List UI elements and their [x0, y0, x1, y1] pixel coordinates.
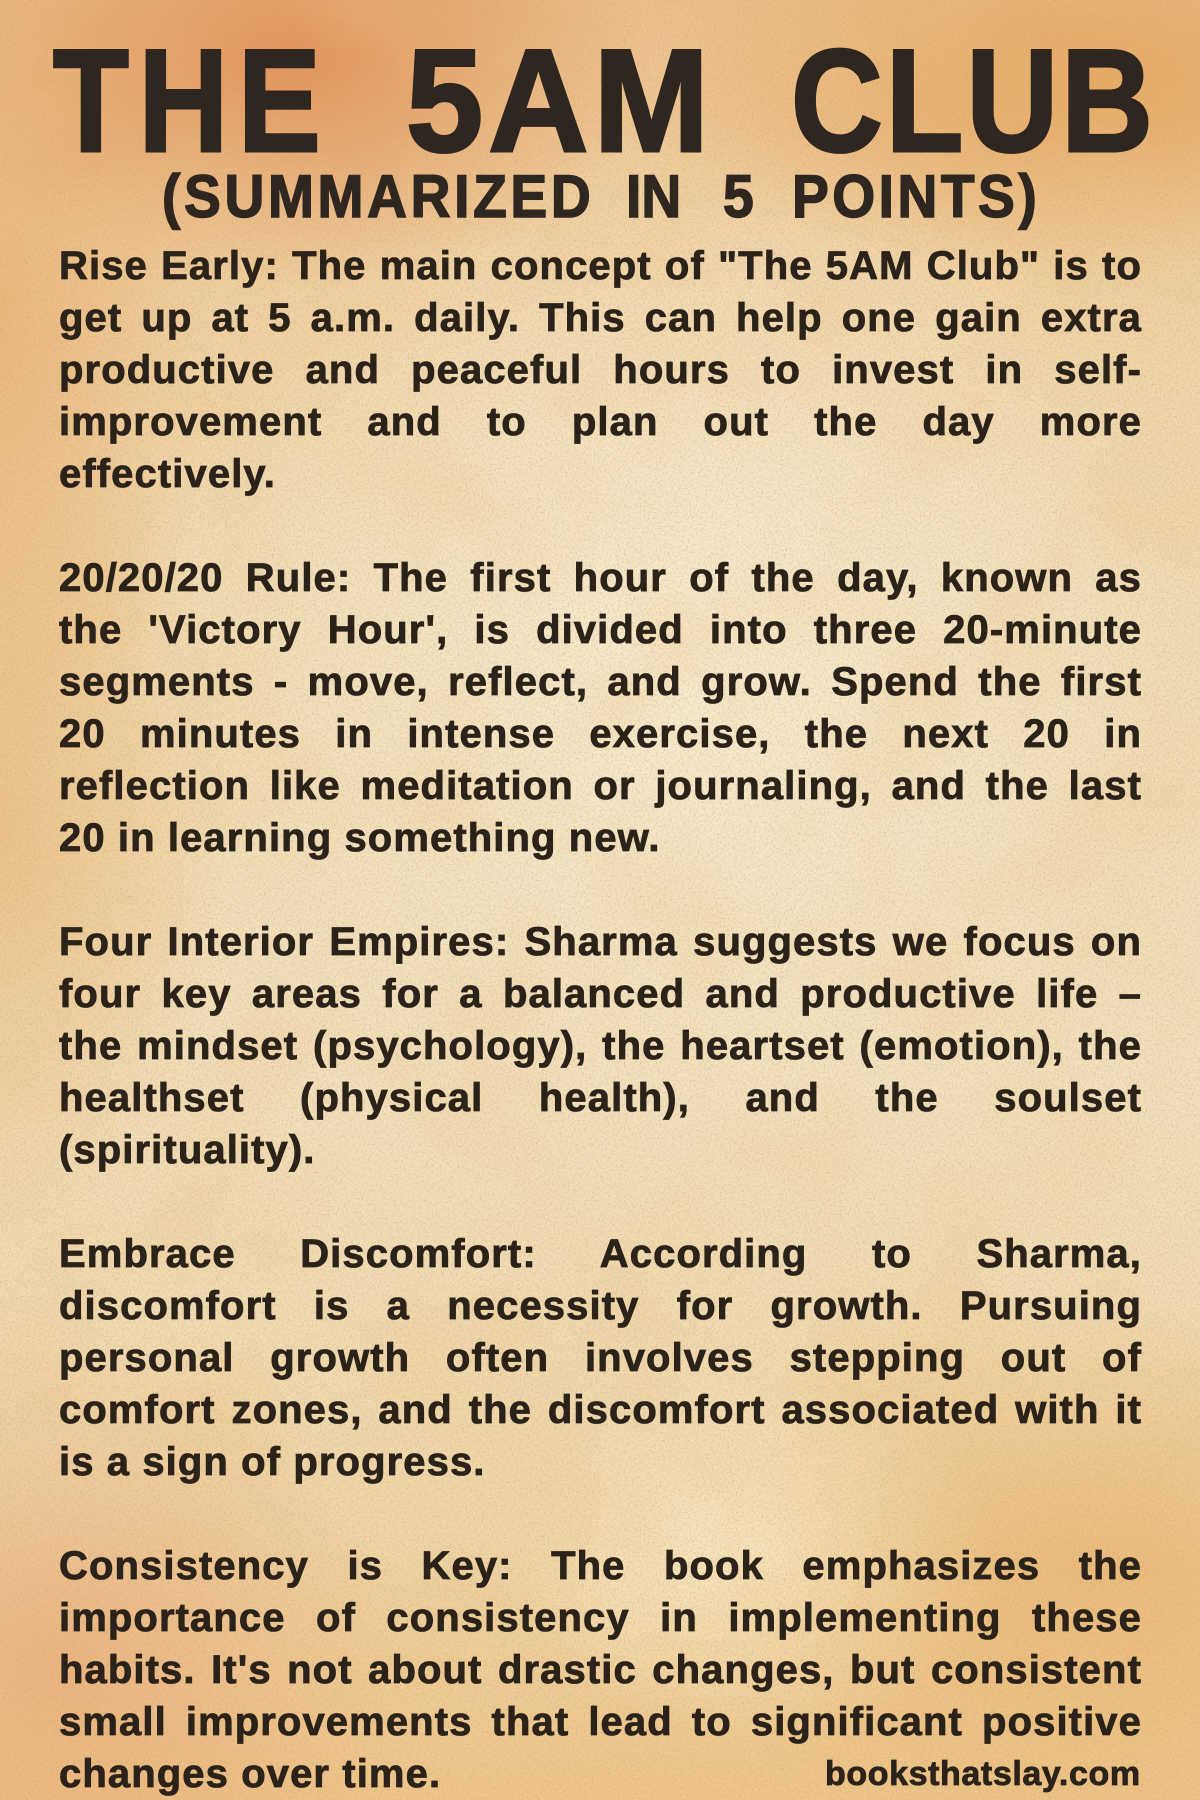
- title: THE: [53, 18, 321, 182]
- subtitle: (SUMMARIZED: [162, 164, 591, 231]
- point 1: rise early: Rise Early: The main concept of "The 5AM Club" is to: [59, 244, 1142, 288]
- point 5: consistency is key: habits. It's not about drastic changes, but consistent: [59, 1648, 1142, 1692]
- point 2: 20/20/20 rule: 20 in learning something new.: [59, 816, 661, 860]
- subtitle: POINTS): [792, 164, 1037, 231]
- point 3: four interior empires: healthset (physical health), and the soulset: [59, 1076, 1142, 1120]
- point 4: embrace discomfort: discomfort is a necessity for growth. Pursuing: [59, 1284, 1142, 1328]
- point 5: consistency is key: Consistency is Key: The book emphasizes the: [59, 1544, 1142, 1588]
- point 2: 20/20/20 rule: 20 minutes in intense exercise, the next 20 in: [59, 712, 1142, 756]
- point 4: embrace discomfort: is a sign of progress.: [59, 1440, 486, 1484]
- point 4: embrace discomfort: personal growth often involves stepping out of: [59, 1336, 1142, 1380]
- point 2: 20/20/20 rule: segments - move, reflect, and grow. Spend the first: [59, 660, 1142, 704]
- point 1: rise early: effectively.: [59, 452, 276, 496]
- point 5: consistency is key: importance of consistency in implementing these: [59, 1596, 1142, 1640]
- point 1: rise early: improvement and to plan out the day more: [59, 400, 1142, 444]
- website credit: booksthatslay.com: [825, 1755, 1141, 1793]
- point 3: four interior empires: [59, 920, 1142, 1172]
- subtitle: [162, 164, 1037, 231]
- point 2: 20/20/20 rule: the 'Victory Hour', is divided into three 20-minute: [59, 608, 1142, 652]
- point 5: consistency is key: changes over time.: [59, 1752, 441, 1796]
- title: 5AM: [406, 20, 709, 183]
- point 3: four interior empires: four key areas for a balanced and productive life –: [59, 972, 1142, 1016]
- point 1: rise early: get up at 5 a.m. daily. This can help one gain extra: [59, 296, 1142, 340]
- title: [53, 18, 1153, 183]
- point 2: 20/20/20 rule: reflection like meditation or journaling, and the last: [59, 764, 1142, 808]
- point 5: consistency is key: small improvements that lead to significant positive: [59, 1700, 1142, 1744]
- point 4: embrace discomfort: Embrace Discomfort: According to Sharma,: [59, 1232, 1142, 1276]
- point 3: four interior empires: (spirituality).: [59, 1128, 316, 1172]
- point 4: embrace discomfort: comfort zones, and the discomfort associated with it: [59, 1388, 1142, 1432]
- point 2: 20/20/20 rule: [59, 556, 1142, 860]
- subtitle: IN: [626, 164, 681, 231]
- point 4: embrace discomfort: [59, 1232, 1142, 1484]
- point 3: four interior empires: Four Interior Empires: Sharma suggests we focus on: [59, 920, 1142, 964]
- point 1: rise early: productive and peaceful hours to invest in self-: [59, 348, 1142, 392]
- title: CLUB: [791, 19, 1153, 182]
- point 3: four interior empires: the mindset (psychology), the heartset (emotion), the: [59, 1024, 1142, 1068]
- point 1: rise early: [59, 244, 1142, 496]
- point 2: 20/20/20 rule: 20/20/20 Rule: The first hour of the day, known as: [59, 556, 1142, 600]
- subtitle: 5: [723, 164, 754, 231]
- point 5: consistency is key: [59, 1544, 1142, 1796]
